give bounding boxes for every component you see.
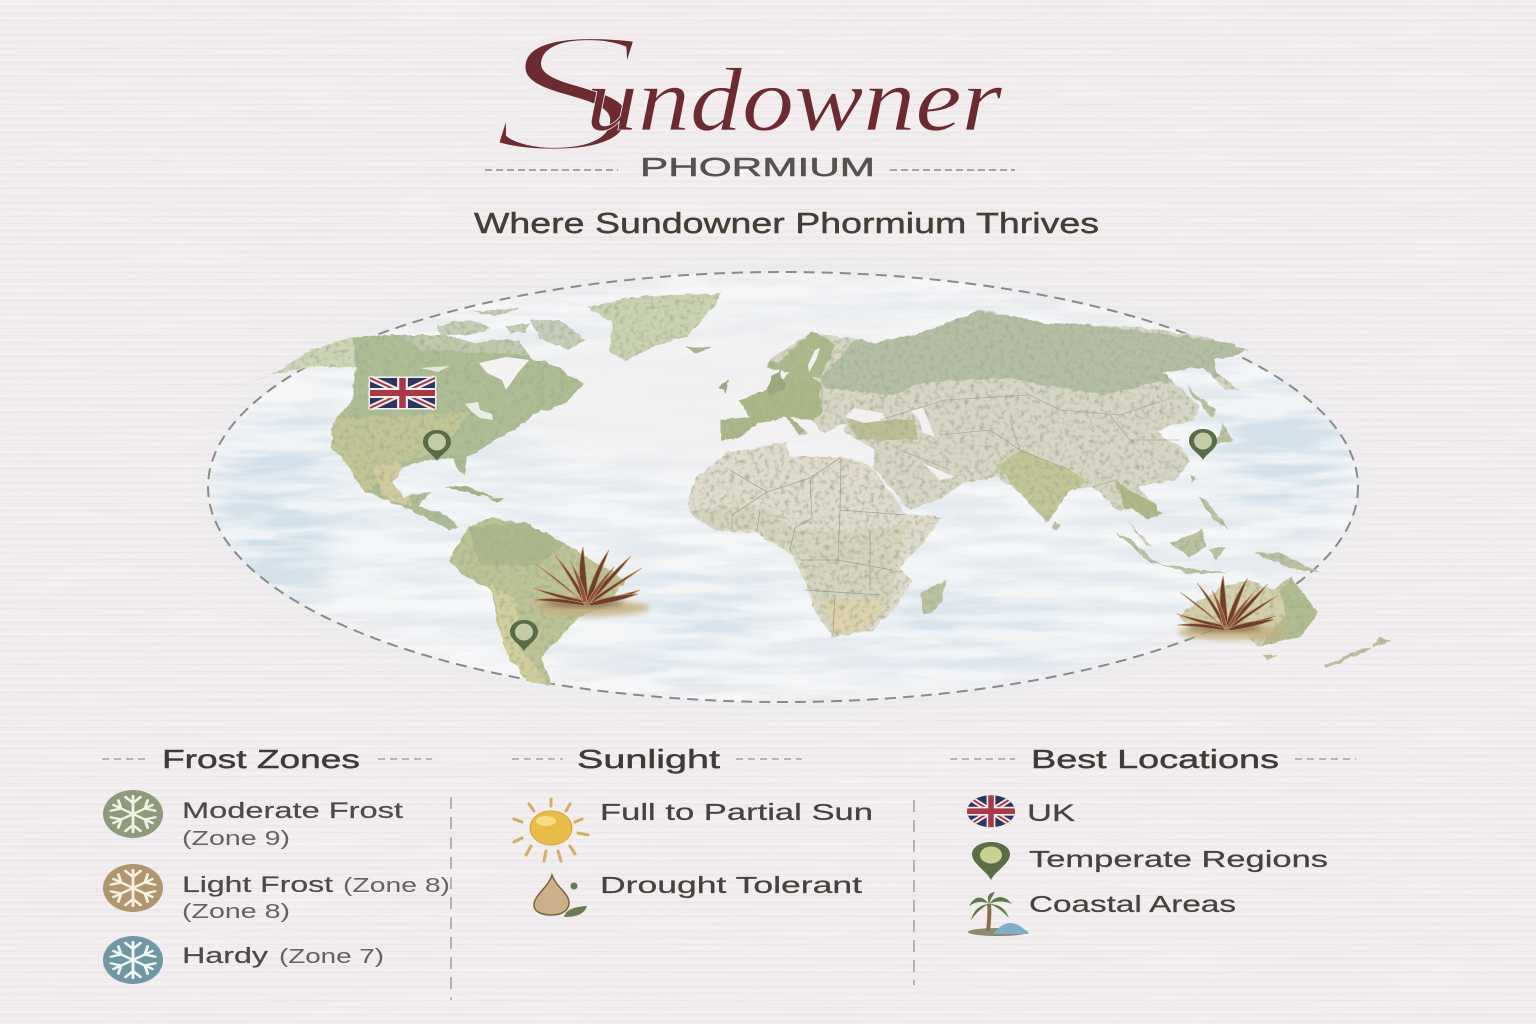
text: Hardy: (Zone 7) (279, 946, 384, 968)
text: Moderate Frost: (Zone 9) (182, 828, 290, 850)
caribbean (445, 486, 498, 498)
text: UK: UK (1027, 800, 1075, 827)
hudson bay and great lakes (420, 357, 529, 420)
Eurasia borders (822, 380, 1180, 487)
pin: Japan (1189, 429, 1217, 460)
arctic islands (437, 308, 585, 350)
text: Drought Tolerant: Drought Tolerant (600, 872, 863, 898)
land: North America (244, 308, 586, 530)
icon: moderate frost (103, 790, 163, 838)
land: Africa (687, 442, 942, 638)
dashed range ellipse (208, 272, 1358, 702)
land: South America (449, 517, 625, 686)
text: Moderate Frost: Moderate Frost (182, 798, 403, 823)
icon: hardy (103, 936, 163, 984)
text: Temperate Regions: Temperate Regions (1029, 846, 1328, 872)
icon: UK flag (967, 795, 1015, 828)
text: Coastal Areas: Coastal Areas (1029, 891, 1236, 917)
text: Full to Partial Sun: Full to Partial Sun (600, 799, 873, 825)
land: Greenland and Iceland (587, 293, 722, 362)
text: Light Frost (182, 872, 450, 923)
column: Frost Zones (102, 744, 450, 984)
text: Light Frost: Light Frost (182, 872, 333, 897)
Africa borders (730, 458, 905, 636)
heading: Best Locations: Best Locations (1031, 744, 1279, 774)
title: Sundowner: S (490, 0, 644, 188)
subtitle: Phormium: PHORMIUM (640, 152, 875, 182)
text: Hardy: Hardy (182, 943, 268, 968)
heading: Where Sundowner Phormium Thrives: Where Sundowner Phormium Thrives (474, 208, 1099, 240)
text: Light Frost: (Zone 8) (343, 875, 450, 897)
land: Australia (1179, 576, 1318, 647)
land: Eurasia (715, 305, 1255, 555)
icon: palm island (968, 892, 1029, 936)
inland seas (808, 348, 955, 480)
icon: drought drop (534, 875, 587, 917)
icon: light frost (103, 864, 163, 912)
column: Best Locations (950, 744, 1356, 936)
title: Sundowner (490, 0, 1003, 188)
plant marker: Australia (1177, 576, 1286, 640)
pin: South America (510, 620, 538, 651)
title: Sundowner: undowner (586, 51, 1003, 150)
text: Moderate Frost (182, 798, 403, 850)
pin: North America (423, 430, 451, 461)
text: Hardy (182, 943, 384, 968)
icon: sun (514, 799, 588, 861)
heading: Sunlight: Sunlight (577, 744, 721, 774)
heading: Frost Zones: Frost Zones (162, 744, 360, 774)
ocean (200, 265, 1370, 710)
UK flag marker (368, 376, 436, 410)
world map (200, 265, 1392, 710)
icon: location pin (972, 842, 1010, 880)
plant marker: South America (533, 547, 650, 616)
text: Light Frost: (Zone 8) (182, 901, 290, 923)
land: islands of Asia and Australasia (718, 370, 1392, 668)
column: Sunlight (512, 744, 873, 917)
